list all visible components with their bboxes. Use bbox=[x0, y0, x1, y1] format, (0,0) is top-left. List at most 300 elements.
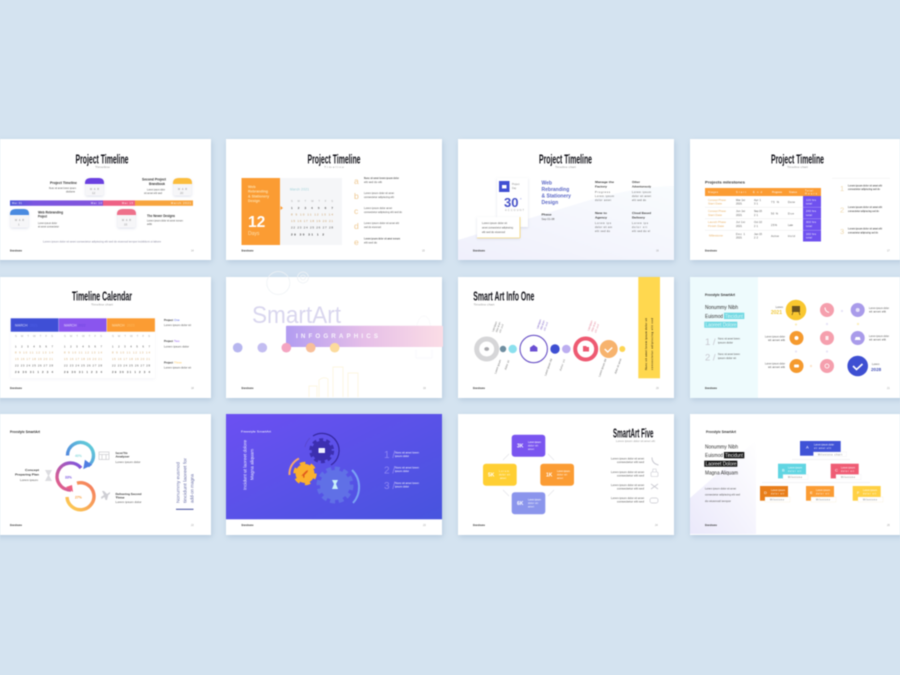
box: purple: dolor sit bbox=[528, 444, 538, 448]
footer: 22 bbox=[191, 524, 194, 527]
list item: plane: Lorem ipsum dolor sit amet bbox=[611, 483, 644, 487]
subtitle: Lorem ipsum dolor sit amet elit bbox=[616, 440, 655, 443]
table: 120 hrs bbox=[806, 199, 817, 202]
calendar grid: second month: 29 30 31 1 2 3 4 bbox=[64, 370, 102, 374]
stat card: ° bbox=[520, 197, 522, 202]
list d: Lorem ipsum dolor sit amet elit bbox=[364, 221, 399, 225]
rotated labels below: Lorem ipsum dol bbox=[597, 358, 608, 377]
stat card: Project bbox=[512, 183, 520, 186]
row labels: Lorem ipsum dolor bbox=[869, 334, 889, 338]
box: yellow: Milestone bbox=[863, 498, 878, 502]
column: manage the factory: Lorem ipsum bbox=[595, 194, 614, 198]
rotated labels above: Lorem ipsum bbox=[535, 319, 542, 329]
project legend: three bbox=[164, 360, 191, 370]
numbered item 2: ipsum dolor bbox=[395, 470, 409, 473]
table: 31 bbox=[754, 202, 759, 206]
heading bbox=[542, 180, 571, 206]
project legend: three: Lorem ipsum dolor sit bbox=[164, 366, 191, 370]
ring: purple: 33% bbox=[65, 476, 72, 480]
box: red bbox=[831, 464, 861, 480]
box: purple: Lorem ipsum bbox=[528, 441, 541, 444]
footer bbox=[705, 523, 890, 527]
label: 2021: 2021 bbox=[771, 310, 782, 316]
table: Status bbox=[789, 191, 798, 194]
column: new to agency bbox=[595, 211, 612, 233]
table: 160 hrs bbox=[806, 233, 817, 236]
title: Smart Art Info One bbox=[473, 290, 534, 304]
ring: orange: 27% bbox=[75, 496, 82, 500]
footer: Brandname bbox=[242, 523, 254, 527]
box: red: Lorem ipsum bbox=[841, 466, 855, 470]
table: 75 % bbox=[771, 200, 780, 204]
paragraph bbox=[705, 486, 741, 503]
table: Mar 1st bbox=[736, 198, 745, 202]
label: 2028: Lorem bbox=[872, 362, 879, 366]
numbered item 1: ipsum dolor bbox=[395, 455, 409, 458]
footer: 19 bbox=[423, 387, 426, 390]
table: 22 bbox=[754, 236, 759, 240]
list b: consectetur adipiscing elit bbox=[364, 195, 394, 199]
footer bbox=[705, 386, 890, 390]
calendar grid: 29 30 31 1 2 bbox=[291, 232, 324, 236]
numbered note 2 bbox=[705, 352, 740, 364]
calendar grid: first month: 22 23 24 25 26 27 28 bbox=[15, 364, 53, 368]
gear: periwinkle bbox=[318, 468, 359, 503]
numbered item 3: 3 / bbox=[384, 481, 395, 492]
title: Project Timeline bbox=[308, 152, 361, 166]
ring: blue: 40% bbox=[75, 454, 82, 458]
rotated labels above: elit sed bbox=[498, 323, 505, 333]
column: manage the factory: dolor amet bbox=[595, 198, 611, 202]
heading with highlights: Nonummy Nibh bbox=[705, 444, 738, 450]
milestone: web rebranding label: Web Rebranding bbox=[38, 210, 63, 214]
label: delivering: Time bbox=[116, 496, 125, 500]
kicker: Freestyle SmartArt bbox=[10, 430, 41, 434]
calendar grid: first month: S M T W T F S bbox=[15, 334, 53, 338]
footer: Brandname bbox=[10, 248, 22, 252]
phase: Phase bbox=[542, 212, 552, 216]
column: other adventurously: Lorem ipsum bbox=[632, 190, 651, 194]
calendar grid: second month bbox=[64, 334, 102, 374]
kicker: Freestyle SmartArt bbox=[241, 430, 271, 434]
icon: pink calendar: 15 bbox=[124, 222, 128, 226]
heading with highlights: Tincidunt bbox=[725, 314, 744, 320]
footer: Brandname bbox=[705, 248, 717, 252]
orange panel: Rebranding bbox=[248, 190, 268, 194]
table: Active bbox=[771, 234, 780, 238]
list item: chat bbox=[611, 496, 658, 504]
rotated labels above bbox=[491, 319, 600, 333]
heading with highlights bbox=[704, 305, 744, 328]
paragraph: consectetur adipiscing elit sed bbox=[705, 492, 741, 496]
table: Stages bbox=[708, 191, 719, 194]
list item: plane: consectetur elit sed bbox=[617, 486, 645, 490]
box: purple: amet bbox=[528, 448, 534, 451]
calendar grid: third month: 22 23 24 25 26 27 28 bbox=[112, 364, 150, 368]
title: Project Timeline bbox=[771, 152, 824, 166]
column: other adventurously: dolor sit amet bbox=[632, 194, 651, 198]
project legend: one: Project bbox=[164, 318, 173, 322]
column: manage the factory: Manage the bbox=[595, 180, 614, 184]
column: other adventurously: elit sed do bbox=[632, 198, 647, 202]
subtitle: Timeline chart bbox=[91, 304, 113, 306]
chain circles bbox=[477, 335, 625, 363]
icon: orange chat bbox=[790, 359, 804, 373]
calendar grid bbox=[290, 188, 333, 236]
numbered note 2: Nunc sit amet lorem bbox=[718, 352, 740, 356]
stat card: Day bbox=[512, 187, 517, 190]
box: yellow: Lorem ipsum bbox=[863, 489, 877, 492]
milestone: project timeline label: dolore bbox=[66, 190, 76, 194]
box: red: C bbox=[835, 468, 838, 472]
icon: purple calendar: 12 bbox=[92, 191, 96, 195]
milestone: the new designs label: Lorem ipsum dolor sit amet nonum bbox=[147, 218, 183, 222]
calendar grid: second month: 8 9 10 11 12 13 14 bbox=[64, 350, 102, 354]
box: orange bbox=[806, 486, 836, 502]
rotated labels above: elit sed bbox=[593, 323, 600, 333]
footer bbox=[242, 523, 426, 527]
label: delivering: Delivering Second bbox=[116, 492, 142, 496]
list item: printer bbox=[611, 469, 658, 478]
table: Launch Phase bbox=[708, 220, 727, 224]
label: concept: Preparing Plan bbox=[15, 472, 39, 476]
connector dots bbox=[795, 310, 859, 367]
box: dark orange: Lorem ipsum bbox=[771, 489, 785, 492]
box: red: Milestone bbox=[841, 476, 856, 479]
calendar grid: third month: 1 2 3 4 5 6 7 bbox=[112, 344, 150, 348]
numbered item 2: Nunc sit amet lorem bbox=[395, 466, 419, 470]
side list: consectetur adipiscing sed do bbox=[848, 230, 878, 234]
project legend: two bbox=[164, 339, 189, 348]
footer: Brandname bbox=[10, 523, 22, 527]
slide 3: project timeline with stat card bbox=[458, 139, 674, 260]
table: 21 bbox=[754, 213, 759, 217]
table: 50 % bbox=[771, 212, 779, 216]
kicker: Freestyle SmartArt bbox=[705, 293, 736, 297]
orange panel: 12 bbox=[248, 214, 265, 231]
subtitle: Timeline chart bbox=[555, 166, 576, 169]
footer: 18 bbox=[191, 387, 194, 390]
calendar body bbox=[11, 318, 155, 378]
rotated labels above: dolor sit am bbox=[494, 321, 502, 333]
table: Concept Phase bbox=[708, 209, 727, 213]
milestone: web rebranding label: Lorem ipsum dolor bbox=[38, 221, 57, 225]
calendar grid: second month: S M T W T F S bbox=[64, 334, 102, 338]
numbered item 2 bbox=[384, 466, 419, 476]
rotated labels above: elit sed bbox=[542, 321, 549, 331]
slide 11: smartart five: SmartArt Five bbox=[613, 426, 654, 440]
table: 2021 bbox=[736, 213, 743, 217]
footer: Brandname bbox=[242, 248, 254, 252]
heading: Rebranding bbox=[542, 187, 569, 193]
numbered item 3: Nunc sit amet lorem bbox=[395, 482, 419, 485]
slide 11: smartart five bbox=[458, 414, 674, 535]
icon: airplane bbox=[101, 491, 110, 500]
column: cloud based delivery: Cloud Based bbox=[632, 211, 651, 215]
milestone: second project label: Lorem ipsum dolor bbox=[147, 188, 165, 192]
footer: Brandname bbox=[473, 386, 485, 390]
project legend: two: Lorem ipsum dolor bbox=[164, 344, 189, 348]
table: Sep 15 bbox=[754, 209, 763, 213]
calendar grid: third month bbox=[112, 334, 150, 374]
rotated labels above: dolor sit am bbox=[539, 320, 546, 330]
heading with highlights: Tincidunt bbox=[725, 453, 744, 459]
calendar header: purple bbox=[59, 318, 106, 332]
footer bbox=[705, 248, 890, 252]
heading with highlights: Euismod bbox=[705, 314, 723, 320]
calendar grid: third month: 8 9 10 11 12 13 14 bbox=[112, 350, 150, 354]
list c: Lorem ipsum dolor amet bbox=[364, 206, 392, 210]
background triangle bbox=[690, 440, 756, 534]
icon: lavender car bbox=[851, 331, 865, 345]
timeline bar: Mar 10 bbox=[91, 201, 103, 205]
milestone: second project label: Brandbook bbox=[149, 182, 165, 186]
icon: hourglass bbox=[45, 470, 52, 481]
list d: d bbox=[354, 221, 359, 231]
numbered note 2: ipsum dolor sit bbox=[718, 356, 736, 360]
calendar grid: 1 2 3 4 5 6 7 bbox=[291, 206, 333, 210]
footer bbox=[10, 386, 194, 390]
rotated labels below: Lorem ipsum bbox=[493, 359, 502, 374]
table: 240 hrs bbox=[806, 210, 817, 213]
icon: pink refresh bbox=[820, 359, 834, 373]
ribbon bbox=[286, 326, 443, 347]
calendar panel bbox=[280, 178, 342, 245]
rotated labels above: Lorem ipsum bbox=[491, 321, 498, 332]
slide 1: project timeline bbox=[0, 139, 211, 260]
box: periwinkle: amet bbox=[528, 506, 534, 508]
connector arrows bbox=[503, 454, 554, 496]
table: 21 bbox=[754, 224, 759, 228]
connector lines bbox=[762, 460, 870, 482]
project legend: one: One bbox=[174, 318, 180, 322]
table: total bbox=[806, 225, 812, 228]
box: yellow bbox=[483, 464, 517, 486]
box: yellow: F bbox=[857, 490, 860, 495]
calendar grid: third month: 15 16 17 18 19 20 21 bbox=[112, 357, 150, 361]
icon: board bbox=[786, 300, 806, 320]
calendar header: orange: MARCH bbox=[112, 324, 125, 328]
icon: blue calendar: MAR bbox=[15, 219, 24, 222]
orange panel: & Stationery bbox=[248, 194, 269, 198]
milestone: second project label bbox=[142, 178, 167, 195]
side list: consectetur adipiscing sed do bbox=[848, 187, 880, 191]
milestone: second project label: Second Project bbox=[142, 178, 167, 182]
vertical heading: Incidunt ut laoreet dolore bbox=[242, 440, 248, 490]
table: total bbox=[806, 214, 812, 217]
box: orange: Lorem ipsum bbox=[557, 470, 570, 473]
icon: orange calendar: 20 bbox=[180, 191, 184, 195]
side list: Lorem ipsum dolor sit amet elit bbox=[848, 226, 882, 230]
rotated labels above: Lorem ipsum bbox=[586, 320, 594, 331]
box: blue root: A bbox=[806, 444, 809, 450]
heading: Web bbox=[542, 180, 552, 186]
list item: plane bbox=[611, 483, 658, 490]
decorative building lines bbox=[309, 367, 358, 397]
footer: 17 bbox=[887, 250, 890, 252]
column: manage the factory: Progress bbox=[595, 190, 611, 194]
box: orange bbox=[540, 464, 574, 486]
gear: dark indigo bbox=[305, 433, 339, 465]
footer: 21 bbox=[887, 387, 890, 390]
side list: 3 bbox=[840, 227, 844, 236]
table: total bbox=[806, 202, 812, 206]
rotated labels below: dolor sit amet bbox=[613, 358, 623, 374]
icon: orange person bbox=[790, 331, 804, 345]
footer bbox=[473, 386, 659, 390]
list e bbox=[354, 236, 401, 247]
rotated labels below: dolor sit bbox=[503, 359, 510, 370]
stat card: 30 bbox=[504, 195, 518, 210]
table: Start Date bbox=[708, 213, 723, 217]
list c: consectetur adipiscing elit sed do bbox=[364, 210, 403, 214]
numbered note 1: 1 / bbox=[705, 337, 716, 348]
calendar grid: 15 16 17 18 19 20 21 bbox=[291, 219, 333, 223]
rotated labels below bbox=[493, 358, 623, 377]
box: red: dolor sit bbox=[841, 470, 854, 473]
icon: phone bbox=[820, 303, 834, 317]
list a bbox=[354, 176, 399, 186]
orange panel: Days bbox=[248, 231, 260, 237]
dot row bbox=[233, 343, 340, 353]
table: Start bbox=[736, 191, 746, 194]
list e: e bbox=[354, 237, 359, 247]
timeline bar: Mar 01 bbox=[12, 201, 23, 205]
side list: Lorem ipsum dolor sit amet elit bbox=[848, 184, 882, 188]
subtitle: Timeline chart bbox=[474, 304, 495, 306]
row labels: sit amet elit bbox=[869, 338, 886, 342]
column: other adventurously: Adventurously bbox=[632, 184, 651, 188]
calendar header: orange: 2023 bbox=[127, 324, 135, 328]
project legend: two: Two bbox=[174, 339, 180, 343]
slide 5: timeline calendar bbox=[0, 277, 211, 398]
box: yellow bbox=[853, 486, 883, 502]
numbered item 2: 2 / bbox=[384, 466, 395, 476]
calendar grid: 22 23 24 25 26 27 28 bbox=[291, 226, 333, 230]
footer: Brandname bbox=[242, 386, 254, 390]
column: new to agency: Lorem ips bbox=[595, 221, 612, 225]
box: cyan: Lorem ipsum bbox=[788, 466, 802, 470]
calendar grid: second month: 15 16 17 18 19 20 21 bbox=[64, 357, 102, 361]
column: new to agency: Agency bbox=[595, 216, 607, 220]
calendar grid: third month: 29 30 31 1 2 3 4 bbox=[112, 370, 150, 374]
box: orange: Milestone bbox=[816, 498, 831, 502]
table: 300 hrs bbox=[806, 221, 817, 224]
yellow band bbox=[638, 277, 660, 378]
title: Project Timeline bbox=[76, 152, 129, 166]
decorative rings bbox=[267, 272, 308, 294]
icon: blue check bbox=[847, 356, 868, 376]
row labels: sit amet elit bbox=[768, 338, 785, 342]
box: cyan: Milestone bbox=[788, 476, 803, 479]
box: purple: 3K bbox=[517, 444, 524, 450]
label: 2021: Lorem bbox=[776, 305, 783, 309]
numbered item 3: ipsum dolor bbox=[395, 486, 409, 488]
label: concept: Lorem ipsum bbox=[20, 478, 38, 482]
icon: newspaper bbox=[99, 452, 109, 460]
footer: Brandname bbox=[473, 248, 485, 252]
milestone: the new designs label: The Newer Designs bbox=[147, 214, 175, 218]
icon: purple calendar bbox=[85, 178, 104, 196]
box: dark orange: Milestone bbox=[770, 498, 785, 502]
column: new to agency: dolor sit am bbox=[595, 225, 612, 229]
numbered note 1: ipsum dolor bbox=[718, 340, 733, 344]
caption: Lorem ipsum dolor sit amet consectetur adipiscing elit sed do eiusmod tempor incididunt ut labore bbox=[43, 240, 162, 244]
row labels: Lorem ipsum dolor bbox=[869, 306, 889, 310]
icon: pink calendar bbox=[117, 209, 136, 228]
note card bbox=[477, 217, 520, 238]
list e: Lorem ipsum dolor sit amet nonum bbox=[364, 236, 401, 240]
title: Timeline Calendar bbox=[72, 290, 132, 304]
row labels bbox=[765, 306, 889, 369]
list item: phone bbox=[611, 456, 658, 465]
table: Done bbox=[788, 200, 796, 204]
orange panel: Design bbox=[248, 199, 260, 203]
ring: blue bbox=[67, 442, 93, 470]
box: orange: dolor sit bbox=[557, 474, 567, 476]
box: dark orange bbox=[760, 486, 790, 502]
icon: pink calendar: MAR bbox=[122, 219, 131, 222]
list item: printer: consectetur elit sed bbox=[617, 474, 645, 478]
calendar header: blue: MARCH bbox=[15, 324, 28, 328]
note card: Lorem ipsum dolor sit bbox=[482, 221, 507, 225]
list item: printer: Lorem ipsum dolor sit amet bbox=[611, 470, 644, 474]
slide 4: project timeline table bbox=[690, 139, 900, 260]
box: purple bbox=[512, 435, 545, 457]
vertical quote bbox=[176, 457, 194, 510]
icon: orange calendar bbox=[173, 178, 192, 196]
box: cyan: dolor sit bbox=[788, 470, 801, 473]
footer: Brandname bbox=[705, 523, 717, 527]
paragraph: Lorem ipsum dolor sit amet bbox=[705, 486, 736, 490]
table: Total bbox=[805, 190, 813, 192]
project legend: three: Project bbox=[164, 360, 173, 364]
table: Dec 1 bbox=[736, 232, 746, 236]
icon: arrow pointer bbox=[280, 206, 283, 210]
phase: Sep 01-08 bbox=[542, 217, 555, 221]
label: 2028 bbox=[871, 362, 882, 372]
label: 2028: 2028 bbox=[871, 367, 882, 372]
calendar grid: first month: 29 30 31 1 2 3 4 bbox=[15, 370, 53, 374]
footer: Brandname bbox=[705, 386, 717, 390]
slide 2: project timeline with calendar bbox=[226, 139, 442, 260]
label: second title bbox=[116, 451, 141, 464]
phase bbox=[542, 212, 555, 221]
column: cloud based delivery: Delivery bbox=[632, 216, 645, 220]
icon: blue calendar: 1 bbox=[18, 222, 20, 226]
list e: elit sed do bbox=[364, 240, 378, 244]
table: 2021 bbox=[736, 224, 743, 228]
table: End bbox=[753, 191, 763, 194]
rotated labels below: dolor sit bbox=[558, 358, 566, 371]
stat card: ACCOUNT bbox=[505, 209, 525, 212]
footer: 16 bbox=[656, 250, 659, 252]
timeline bar bbox=[10, 200, 193, 206]
vertical heading bbox=[242, 440, 256, 490]
table: Due bbox=[788, 212, 795, 216]
box: orange: 1K bbox=[546, 472, 553, 478]
icon: pink circle bbox=[820, 331, 834, 345]
table: Finish Date bbox=[708, 224, 725, 228]
list item: phone: Lorem ipsum dolor sit amet bbox=[611, 456, 644, 460]
label: 2021 bbox=[771, 305, 783, 316]
side list bbox=[832, 178, 890, 236]
table: 2021 bbox=[736, 202, 743, 206]
table: total bbox=[806, 236, 812, 240]
label: delivering bbox=[116, 492, 142, 504]
list item: chat: consectetur elit sed bbox=[617, 500, 645, 504]
box: yellow: 5K bbox=[488, 472, 495, 478]
